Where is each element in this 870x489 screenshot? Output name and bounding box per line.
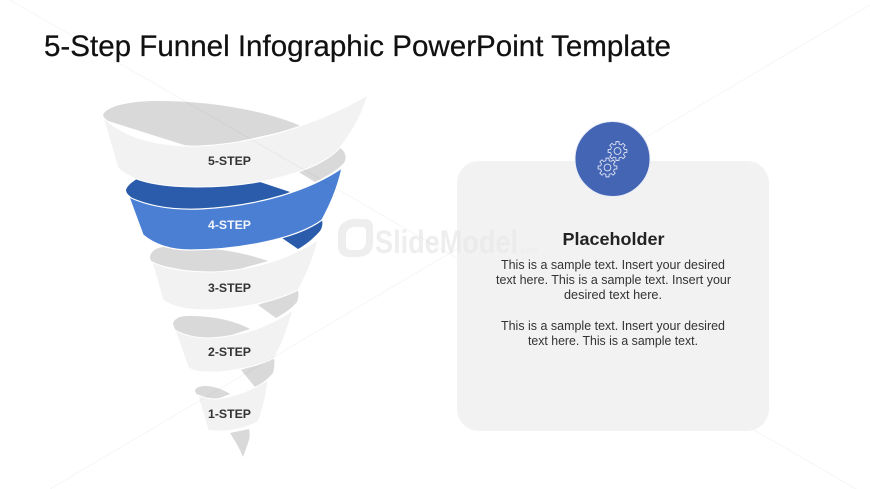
back piece: 4-step — [282, 220, 322, 249]
back piece: 2-step — [241, 358, 274, 387]
icon: lower gear — [598, 158, 617, 177]
watermark: SlideModel — [375, 224, 518, 260]
text block: first paragraph — [496, 258, 731, 302]
inner ellipse: 4-step — [126, 179, 290, 212]
band: 2-step — [175, 310, 293, 372]
label: 4-step: 4-STEP — [208, 220, 251, 232]
text block: second paragraph: text here. This is a sample text. — [528, 334, 698, 348]
card watermark: .com — [519, 246, 538, 255]
watermark — [338, 219, 518, 260]
text block: second paragraph: This is a sample text. Insert your desired — [501, 319, 725, 333]
card watermark: SlideModel — [375, 224, 518, 260]
label: 2-step: 2-STEP — [208, 347, 251, 359]
back piece: 1-step — [230, 429, 250, 457]
panel: description card — [457, 161, 769, 431]
label: 5-step: 5-STEP — [208, 156, 251, 168]
band: 3-step — [152, 240, 318, 310]
title: 5-Step Funnel Infographic PowerPoint Template — [44, 30, 671, 63]
text block: first paragraph: This is a sample text. Insert your desired — [501, 258, 725, 272]
band: 4-step — [129, 168, 342, 250]
icon: upper gear — [608, 142, 627, 160]
heading: placeholder: Placeholder — [562, 229, 665, 249]
label: 3-step: 3-STEP — [208, 283, 251, 295]
inner ellipse: 3-step — [150, 247, 268, 276]
funnel — [103, 95, 368, 457]
back piece: 3-step — [258, 290, 298, 318]
inner ellipse: 1-step — [195, 386, 230, 401]
inner ellipse: 5-step — [103, 101, 303, 150]
band: 1-step — [198, 380, 268, 431]
band: 5-step — [103, 95, 368, 187]
text block: first paragraph: text here. This is a sample text. Insert your — [496, 273, 731, 287]
back piece: 5-step — [297, 148, 346, 182]
icon: gears badge — [575, 122, 650, 196]
inner ellipse: 2-step — [173, 316, 250, 342]
label: 1-step: 1-STEP — [208, 409, 251, 421]
text block: first paragraph: desired text here. — [564, 288, 662, 302]
text block: second paragraph — [501, 319, 725, 348]
